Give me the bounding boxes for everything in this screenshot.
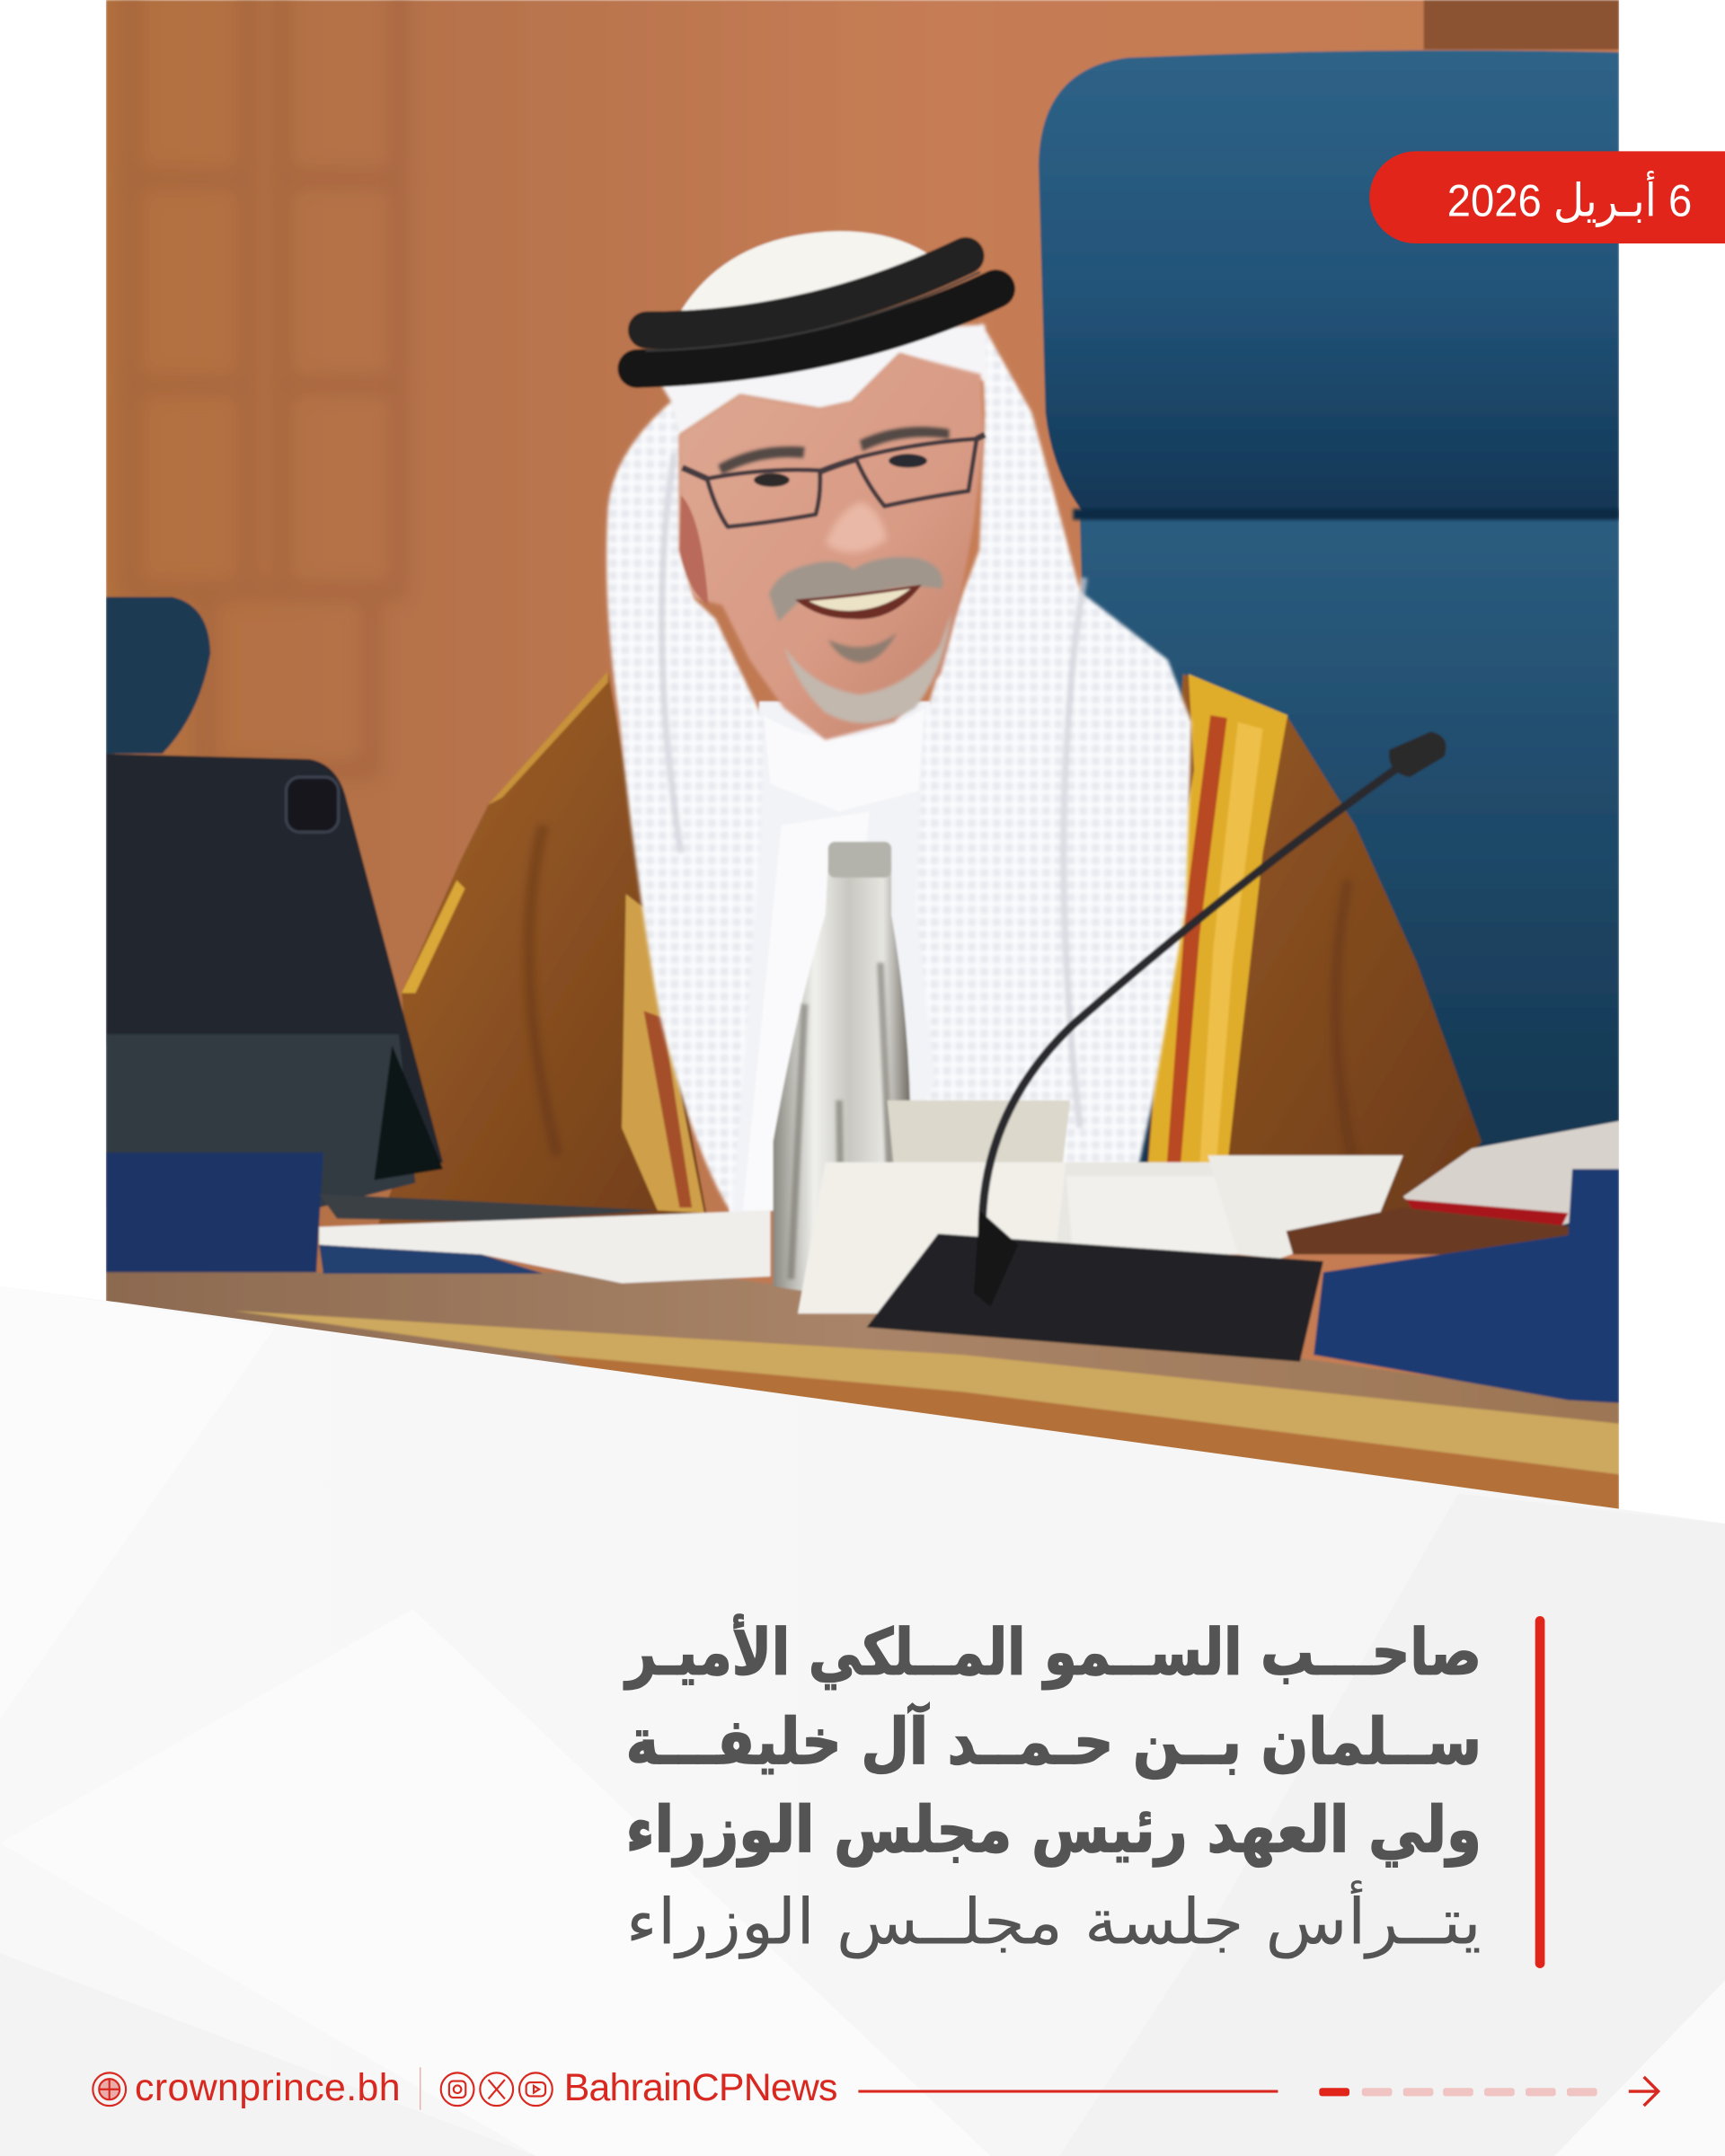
headline line 1: صاحـــب الســمو المــلكي الأميـر: [624, 1613, 1482, 1690]
smile: [795, 585, 922, 619]
moustache: [769, 557, 942, 622]
social accounts: [441, 2066, 837, 2109]
microphone: [974, 732, 1446, 1307]
teeth: [809, 588, 911, 611]
arrow: [1629, 2077, 1659, 2106]
gold table edge: [234, 1311, 1619, 1474]
background facets: [0, 1286, 1725, 2156]
small chair at left: [106, 596, 210, 754]
red folder: [1403, 1121, 1619, 1227]
glass and cups: [888, 1100, 1403, 1272]
water bottle: [773, 842, 911, 1293]
glasses: [682, 435, 985, 526]
headline line 2: ســلمان بــن حـمــد آل خليفـــة: [626, 1702, 1482, 1779]
folder red strip: [1406, 1199, 1568, 1227]
headline block: [624, 1613, 1482, 1959]
white ghutra: [606, 322, 1191, 1213]
blue leather chair: [1039, 50, 1619, 1251]
white thobe: [729, 702, 956, 1217]
accent bar: [1535, 1616, 1544, 1968]
white napkin box: [798, 1162, 1066, 1313]
date badge: [1369, 151, 1725, 243]
black agal: [637, 256, 996, 368]
subheading: يتــرأس جلسة مجلــس الوزراء: [626, 1879, 1482, 1959]
website link: [93, 2066, 401, 2109]
footer: [93, 2066, 1659, 2110]
wood wall background: [106, 0, 1619, 1513]
thobe collar and tie: [765, 720, 922, 1141]
beard: [784, 612, 952, 723]
blue tray under papers: [319, 1245, 544, 1274]
eyebrows: [718, 427, 949, 474]
eyes: [754, 473, 790, 487]
tablet camera: [286, 777, 339, 832]
microphone base: [867, 1233, 1323, 1362]
white cap: [681, 231, 938, 311]
social handle: BahrainCPNews: [564, 2066, 837, 2109]
ear: [679, 495, 709, 605]
goatee: [828, 632, 897, 663]
website text: crownprince.bh: [135, 2066, 401, 2109]
headline line 3: ولي العهد رئيس مجلس الوزراء: [626, 1793, 1482, 1868]
table front: [550, 1355, 1619, 1513]
date text: 6 أبـريل 2026: [1447, 170, 1692, 227]
robe: [378, 671, 1482, 1238]
face: [679, 353, 985, 740]
bottom white panel: [0, 1286, 1725, 2156]
blue box at right: [1314, 1169, 1619, 1403]
icon: X: [480, 2072, 513, 2106]
brown book: [1287, 1207, 1575, 1254]
blue folder box at left: [106, 1153, 323, 1272]
pagination dashes: [1319, 2088, 1597, 2096]
gold trim: [622, 674, 1287, 1213]
tablet on stand: [106, 754, 443, 1207]
nose: [826, 502, 888, 552]
icon: globe: [93, 2072, 126, 2106]
table top: [106, 1272, 1619, 1513]
icon: instagram: [441, 2072, 473, 2106]
dark tablet base: [319, 1194, 658, 1222]
icon: YouTube: [519, 2072, 553, 2106]
papers: [319, 1210, 770, 1284]
photo: prince at cabinet table: [106, 0, 1619, 1513]
